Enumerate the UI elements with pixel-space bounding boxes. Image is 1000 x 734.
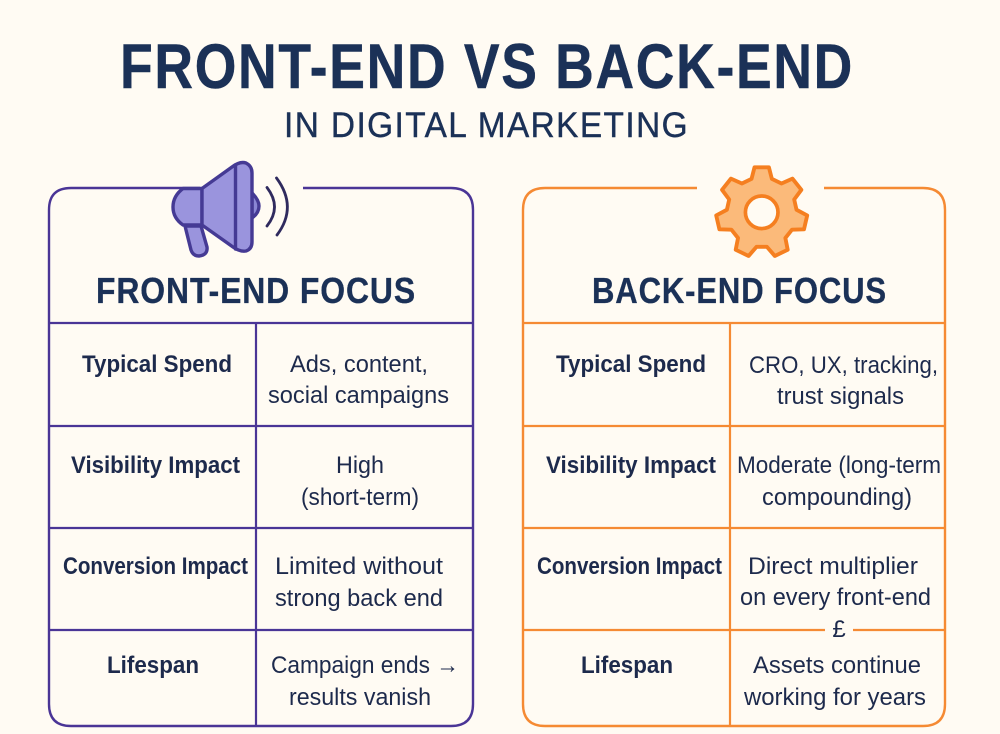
- row: conversion impact: £: [832, 616, 846, 643]
- row: typical spend: Typical Spend: [556, 351, 706, 378]
- row: visibility impact: Moderate (long-term: [737, 452, 941, 479]
- subtitle: IN DIGITAL MARKETING: [284, 106, 689, 145]
- row: lifespan: [107, 652, 459, 711]
- row: typical spend: trust signals: [777, 383, 904, 410]
- row: conversion impact: Conversion Impact: [63, 553, 248, 580]
- panel: back-end focus: [523, 167, 945, 726]
- row: visibility impact: [546, 452, 941, 511]
- heading: front-end focus: FRONT-END FOCUS: [96, 270, 416, 311]
- row: visibility impact: compounding): [762, 484, 912, 511]
- row: lifespan: results vanish: [289, 684, 431, 711]
- heading: back-end focus: BACK-END FOCUS: [592, 270, 887, 311]
- row: lifespan: working for years: [743, 684, 926, 711]
- row: lifespan: Assets continue: [753, 652, 921, 679]
- row: conversion impact: Direct multiplier: [748, 553, 918, 580]
- panel: front-end focus: [49, 162, 473, 726]
- row: typical spend: [556, 351, 938, 410]
- icon: megaphone: [173, 162, 287, 256]
- row: conversion impact: [537, 553, 931, 643]
- row: lifespan: [581, 652, 926, 711]
- row: visibility impact: Visibility Impact: [546, 452, 716, 479]
- row: conversion impact: on every front-end: [740, 584, 931, 611]
- row: visibility impact: [71, 452, 419, 511]
- row: lifespan: Lifespan: [107, 652, 199, 679]
- row: lifespan: Lifespan: [581, 652, 673, 679]
- row: lifespan: Campaign ends →: [271, 652, 459, 679]
- row: typical spend: CRO, UX, tracking,: [749, 352, 938, 379]
- row: typical spend: Ads, content,: [290, 351, 428, 378]
- row: visibility impact: Visibility Impact: [71, 452, 240, 479]
- icon: gear: [716, 167, 807, 256]
- row: visibility impact: High: [336, 452, 384, 479]
- row: typical spend: Typical Spend: [82, 351, 232, 378]
- row: typical spend: [82, 351, 449, 409]
- row: conversion impact: [63, 553, 443, 612]
- row: typical spend: social campaigns: [268, 382, 449, 409]
- title: FRONT-END VS BACK-END: [120, 32, 854, 102]
- row: conversion impact: Conversion Impact: [537, 553, 722, 580]
- row: visibility impact: (short-term): [301, 484, 419, 511]
- row: conversion impact: strong back end: [275, 585, 443, 612]
- row: conversion impact: Limited without: [275, 553, 443, 580]
